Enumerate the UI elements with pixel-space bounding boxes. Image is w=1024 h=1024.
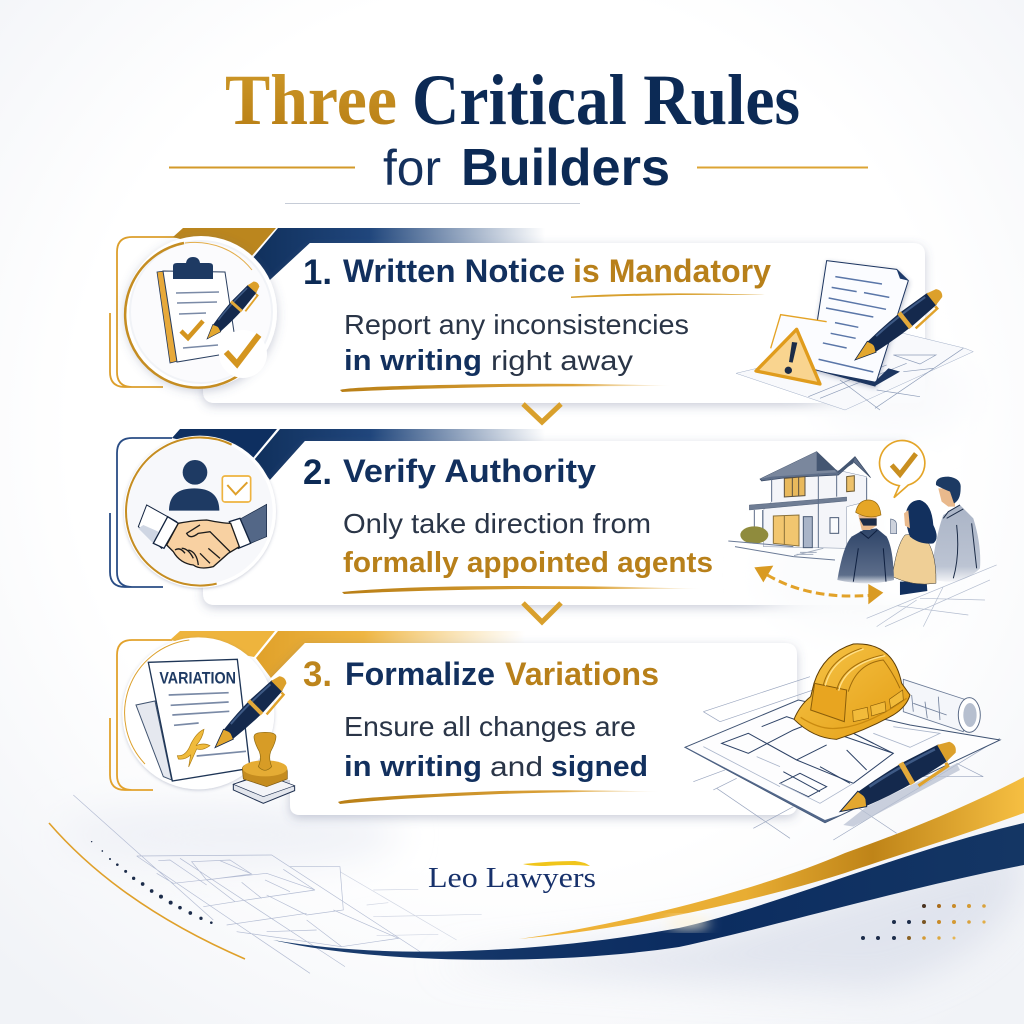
decorative blueprint sketch <box>73 795 482 973</box>
panel 1 ribbon navy <box>252 228 545 280</box>
panel 3 body text: signed <box>551 751 648 783</box>
panel 2 heading: 2. <box>303 453 332 492</box>
decorative gold arc <box>49 823 245 959</box>
panel 3 card <box>262 643 797 815</box>
pen on blueprint <box>834 735 963 826</box>
swoosh highlight <box>666 918 710 928</box>
panel 2 body text: formally appointed agents <box>343 547 713 579</box>
icon: clipboard with pen <box>125 236 277 388</box>
title: Three <box>225 60 397 140</box>
panel 1 ribbon gold <box>173 228 276 258</box>
panel 1 underline <box>340 384 672 392</box>
title: Builders <box>461 139 670 197</box>
hard hat <box>794 644 910 739</box>
panel 3 underline <box>338 790 660 804</box>
blueprint roll <box>903 679 980 732</box>
icon: variation document with stamp <box>122 637 295 803</box>
arrow: two-way dashed <box>754 566 883 604</box>
title: for <box>383 140 441 196</box>
panel 3 body text: in writing <box>344 751 482 783</box>
logo: Leo Lawyers: Leo Lawyers <box>428 862 596 894</box>
panel 3 ribbon gold <box>170 631 275 657</box>
illustration: house and team <box>728 441 997 627</box>
panel 3 frame <box>110 640 172 790</box>
panel 3 heading: 3. <box>303 655 332 694</box>
panel 3 body text: and <box>490 751 543 782</box>
title <box>225 60 800 197</box>
panel 1 heading: 1. <box>303 253 332 292</box>
navy swoosh <box>273 823 1024 960</box>
house <box>728 452 871 560</box>
lower shading <box>430 840 1024 990</box>
panel 3 heading: Formalize <box>345 656 495 692</box>
person: builder <box>837 500 894 583</box>
panel 1 heading: is Mandatory <box>573 253 771 289</box>
panel 2 card <box>203 441 905 605</box>
chevron 1 <box>523 404 561 422</box>
panel 2: verify authority <box>110 429 997 640</box>
panel 1 body text <box>344 309 689 377</box>
panel 2 underline <box>342 586 702 594</box>
panel 2 heading: Verify Authority <box>343 453 596 489</box>
panel 3: formalize variations <box>110 631 1000 840</box>
panel 2 frame <box>110 438 172 587</box>
illustration: hard hat on blueprint with roll and pen <box>685 644 1000 840</box>
panel 3 ribbon fade <box>256 631 525 678</box>
gold swoosh <box>519 777 1024 939</box>
dotted arc <box>91 841 213 924</box>
panel 1 card <box>203 243 925 403</box>
chevron 2 <box>523 603 561 622</box>
panel 2 ribbon dark <box>172 429 277 458</box>
panel 2 body text: Only take direction from <box>343 508 651 539</box>
dot grid <box>861 904 986 940</box>
panel 1 body text: in writing <box>344 345 482 377</box>
panel 3 body text: Ensure all changes are <box>344 711 636 742</box>
panel 1 body text: Report any inconsistencies <box>344 309 689 340</box>
panel 1: written notice <box>110 228 975 440</box>
title: Critical Rules <box>412 60 800 140</box>
panel 2 ribbon fade <box>254 429 545 480</box>
icon: person and handshake <box>124 436 276 588</box>
panel 1 body text: right away <box>491 345 633 376</box>
icon: variation document with stamp: VARIATION <box>159 668 236 687</box>
icon: document with warning and blueprint <box>736 261 973 410</box>
panel 3 heading: Variations <box>505 656 659 692</box>
panel 3 body text <box>344 711 648 783</box>
person: woman <box>892 500 937 595</box>
person: man <box>930 477 980 582</box>
panel 1 heading: Written Notice <box>343 253 565 289</box>
panel 3 heading <box>303 655 659 694</box>
panel 1 heading <box>303 253 771 292</box>
speech bubble <box>880 441 925 498</box>
panel 1 frame <box>110 237 186 387</box>
panel 2 body text <box>343 508 713 579</box>
